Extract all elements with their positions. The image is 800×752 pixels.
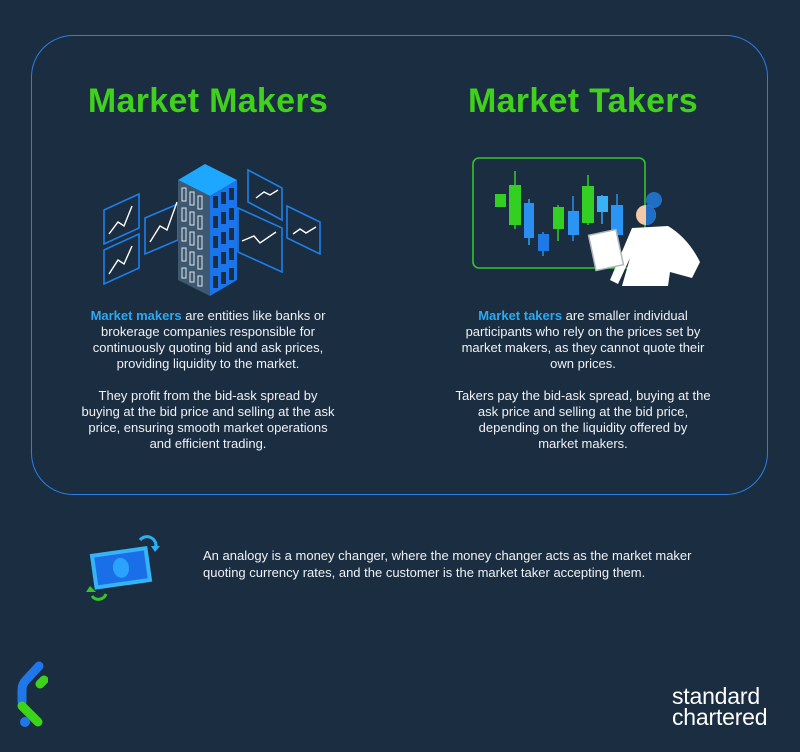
text: market makers description: and efficient trading.: [150, 436, 266, 451]
text: market takers description: ask price and selling at the bid price,: [478, 404, 688, 419]
logo: standard chartered wordmark: [672, 683, 767, 730]
text: market takers description: Market takers are smaller individual: [478, 308, 688, 323]
text: market takers description: depending on the liquidity offered by: [479, 420, 687, 435]
logo: standard chartered wordmark: chartered: [672, 704, 767, 730]
text: market takers description: own prices.: [550, 356, 616, 371]
text: market makers description: price, ensuring smooth market operations: [88, 420, 328, 435]
text: market takers description: market makers.: [538, 436, 628, 451]
icon: money exchange: [86, 535, 160, 601]
logo: standard chartered wordmark: standard: [672, 683, 760, 709]
logo: standard chartered mark: [18, 662, 48, 727]
text: market makers description: Market makers are entities like banks or: [91, 308, 325, 323]
heading: market makers: Market Makers: [88, 82, 328, 120]
icon: trader with candlestick chart: [472, 157, 700, 286]
text: market makers description: [82, 308, 334, 451]
text: analogy: quoting currency rates, and the customer is the market taker accepting them.: [203, 565, 645, 580]
text: analogy: [203, 548, 692, 580]
text: market takers description: [455, 308, 711, 451]
icon: building with charts: [103, 164, 321, 296]
heading: market takers: Market Takers: [468, 82, 698, 120]
text: market makers description: continuously quoting bid and ask prices,: [93, 340, 323, 355]
text: market makers description: buying at the bid price and selling at the ask: [82, 404, 334, 419]
text: market takers description: market makers, as they cannot quote their: [462, 340, 704, 355]
text: market takers description: participants who rely on the prices set by: [466, 324, 700, 339]
text: market makers description: They profit from the bid-ask spread by: [99, 388, 317, 403]
text: market takers description: Takers pay the bid-ask spread, buying at the: [455, 388, 711, 403]
text: analogy: An analogy is a money changer, where the money changer acts as the market maker: [203, 548, 691, 563]
panel: comparison: [31, 35, 768, 495]
text: market makers description: providing liquidity to the market.: [117, 356, 299, 371]
text: market makers description: brokerage companies responsible for: [101, 324, 315, 339]
